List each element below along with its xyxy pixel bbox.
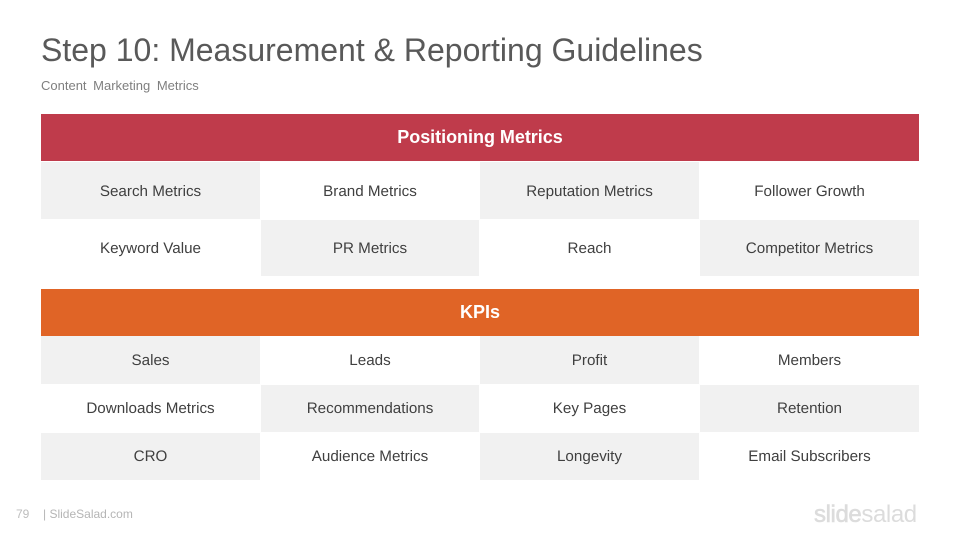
- cell: leads: Leads: [349, 352, 391, 368]
- cell: sales: Sales: [132, 352, 170, 368]
- cell: profit: [480, 336, 699, 384]
- cell: longevity: Longevity: [557, 448, 622, 465]
- cell: reputation metrics: [480, 162, 699, 219]
- cell: cro: CRO: [134, 448, 167, 465]
- cell: profit: Profit: [572, 352, 607, 368]
- panel: positioning metrics: [41, 114, 919, 276]
- cell: keyword value: Keyword Value: [100, 240, 201, 256]
- cell: search metrics: [41, 162, 260, 219]
- cell: recommendations: [261, 385, 479, 432]
- cell: search metrics: Search Metrics: [100, 182, 201, 200]
- cell: reputation metrics: Reputation Metrics: [526, 182, 653, 200]
- cell: retention: Retention: [777, 400, 842, 417]
- cell: follower growth: Follower Growth: [754, 182, 865, 200]
- cell: recommendations: Recommendations: [307, 400, 433, 417]
- page number: 79: [16, 507, 29, 521]
- heading: positioning metrics: Positioning Metrics: [397, 127, 563, 147]
- cell: key pages: Key Pages: [553, 400, 626, 417]
- heading: kpis: [41, 289, 919, 336]
- cell: members: Members: [778, 352, 841, 368]
- heading: positioning metrics: [41, 114, 919, 161]
- cell: longevity: [480, 433, 699, 480]
- cell: email subscribers: Email Subscribers: [748, 448, 871, 465]
- cell: downloads metrics: Downloads Metrics: [86, 400, 215, 417]
- cell: pr metrics: [261, 220, 479, 276]
- cell: cro: [41, 433, 260, 480]
- cell: pr metrics: PR Metrics: [333, 240, 407, 256]
- cell: retention: [700, 385, 919, 432]
- cell: sales: [41, 336, 260, 384]
- title: Step 10: Measurement & Reporting Guidelines: [41, 32, 703, 68]
- heading: kpis: KPIs: [460, 302, 500, 322]
- cell: brand metrics: Brand Metrics: [323, 182, 417, 200]
- cell: competitor metrics: [700, 220, 919, 276]
- footer source: | SlideSalad.com: [43, 507, 133, 521]
- panel: kpis: [41, 289, 919, 480]
- cell: competitor metrics: Competitor Metrics: [746, 240, 873, 256]
- cell: reach: Reach: [568, 240, 611, 256]
- logo: slidesalad: slidesalad: [814, 501, 917, 528]
- cell: audience metrics: Audience Metrics: [312, 448, 428, 465]
- subtitle: Content Marketing Metrics: [41, 78, 199, 93]
